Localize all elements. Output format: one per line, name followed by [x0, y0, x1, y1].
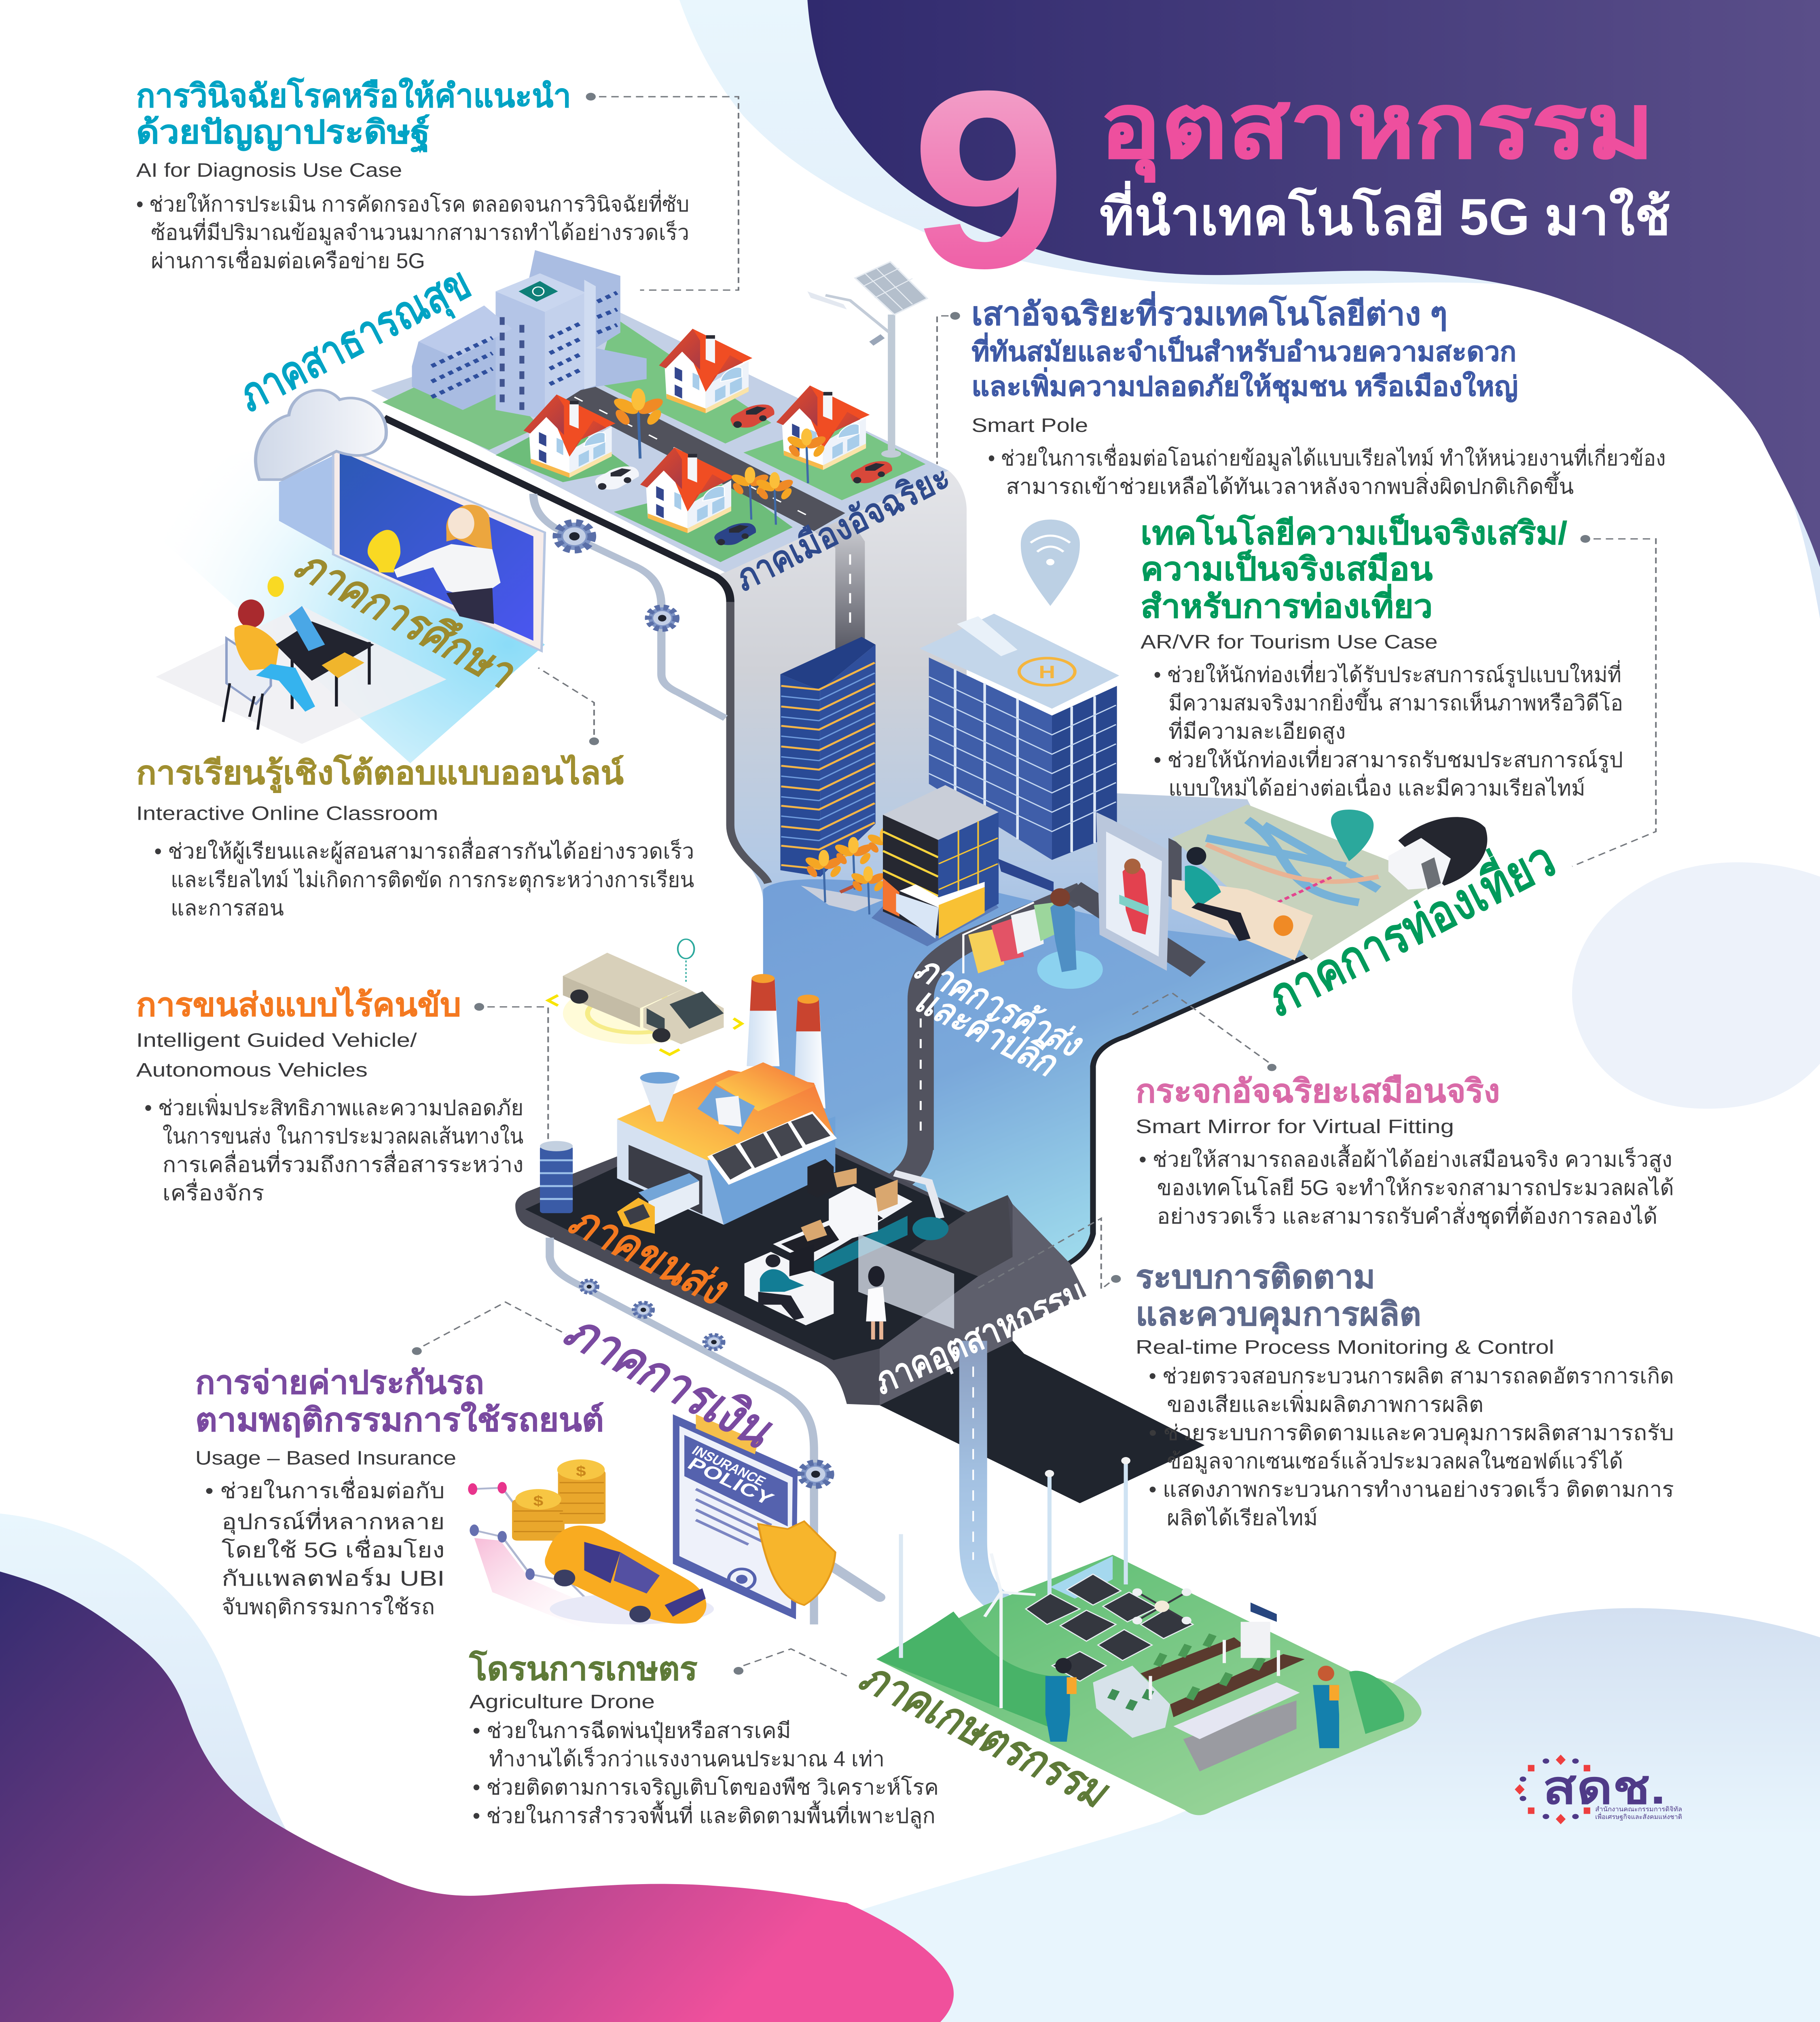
logo: ONDE: เพื่อเศรษฐกิจและสังคมแห่งชาติ: [1595, 1813, 1682, 1821]
bullet text: • ช่วยเพิ่มประสิทธิภาพและความปลอดภัย: [144, 1093, 523, 1120]
agriculture plate: [876, 1555, 1422, 1815]
subtitle: Autonomous Vehicles: [136, 1059, 368, 1081]
bullet text: แบบใหม่ได้อย่างต่อเนื่อง และมีความเรียลไทม์: [1168, 774, 1585, 800]
bullet text: • ช่วยติดตามการเจริญเติบโตของพืช วิเคราะห์โรค: [473, 1775, 939, 1800]
sector label: education: ภาคการศึกษา: [286, 542, 530, 697]
bullet text: ซ้อนที่มีปริมาณข้อมูลจำนวนมากสามารถทำได้อย่างรวดเร็ว: [151, 218, 689, 245]
bullet text: อุปกรณ์ที่หลากหลาย: [222, 1507, 445, 1535]
road: retail curve into factory: [883, 1141, 921, 1191]
bullet text: • ช่วยให้สามารถลองเสื้อผ้าได้อย่างเสมือนจริง ความเร็วสูง: [1139, 1144, 1672, 1172]
bullet text: • ช่วยให้การประเมิน การคัดกรองโรค ตลอดจนการวินิจฉัยที่ซับ: [136, 190, 689, 216]
connector: [1572, 535, 1656, 866]
pipe: finance link with gears: [550, 1237, 830, 1624]
heading: [136, 77, 571, 153]
heading: และควบคุมการผลิต: [1136, 1297, 1421, 1335]
pipe: drop to agriculture: [973, 1341, 1021, 1614]
connector: [1132, 993, 1276, 1071]
data graph nodes: [468, 1482, 609, 1637]
heading: [195, 1365, 604, 1438]
education light cone: [98, 445, 545, 763]
icon: vr headset: [1388, 817, 1487, 890]
bullet text: • ช่วยให้นักท่องเที่ยวได้รับประสบการณ์รูปแบบใหม่ที่: [1154, 660, 1621, 687]
clothes rack: [963, 903, 1057, 973]
small cargo truck: [617, 1173, 699, 1234]
heading: [1136, 1259, 1421, 1335]
smart pole: [807, 262, 927, 458]
smart mirror: [1096, 812, 1182, 971]
central ribbon: grey to blue smart city column: [715, 471, 1323, 1270]
background: bottom left light band: [0, 1514, 290, 1882]
heading: และเพิ่มความปลอดภัยให้ชุมชน หรือเมืองใหญ่: [971, 367, 1518, 404]
connector: [538, 668, 599, 745]
background: bottom right blue wave: [788, 1608, 1820, 2022]
bullet text: ของเทคโนโลยี 5G จะทำให้กระจกสามารถประมวลผลได้: [1157, 1176, 1674, 1200]
background: right pale blob: [1572, 862, 1820, 1109]
solar panels: [1026, 1574, 1193, 1681]
smart light poles: [901, 1457, 1130, 1658]
subtitle: Usage – Based Insurance: [195, 1447, 456, 1469]
icon: shield: [758, 1521, 835, 1605]
bullet text: • แสดงภาพกระบวนการทำงานอย่างรวดเร็ว ติดตามการ: [1149, 1477, 1674, 1502]
dark tail ramp: [880, 1341, 1204, 1503]
wind turbine: [985, 1553, 1035, 1708]
sector label: transport: ภาคขนส่ง: [560, 1197, 741, 1313]
background: dark purple header blob: [807, 0, 1820, 567]
sector label: tourism: ภาคการท่องเที่ยว: [1255, 824, 1564, 1027]
subtitle: Smart Mirror for Virtual Fitting: [1136, 1116, 1454, 1138]
desk worker: [745, 1244, 834, 1325]
bullet text: • ช่วยในการเชื่อมต่อกับ: [205, 1476, 445, 1503]
bullet text: เครื่องจักร: [163, 1178, 264, 1205]
bullet text: [1154, 660, 1623, 800]
panel: process monitoring: [976, 1218, 1674, 1530]
heading: เสาอัจฉริยะที่รวมเทคโนโลยีต่าง ๆ: [971, 291, 1448, 332]
delivery truck with sensing rings: [548, 939, 742, 1055]
connector: [976, 1218, 1121, 1289]
panel: autonomous vehicles: [136, 987, 548, 1205]
heading: กระจกอัจฉริยะเสมือนจริง: [1136, 1073, 1500, 1109]
background: light blue band behind header: [679, 0, 1820, 619]
sector label: industry: ภาคอุตสาหกรรม: [869, 1271, 1091, 1404]
bullet text: [136, 190, 689, 273]
background: bottom left purple pink blob: [0, 1571, 954, 2022]
bullet text: จับพฤติกรรมการใช้รถ: [222, 1595, 435, 1619]
pole strut under shield: [832, 1566, 880, 1597]
subtitle: AR/VR for Tourism Use Case: [1141, 631, 1438, 653]
bullet text: มีความสมจริงมากยิ่งขึ้น สามารถเห็นภาพหรือวิดีโอ: [1168, 688, 1623, 715]
sector label: smart city: ภาคเมืองอัจฉริยะ: [729, 456, 956, 599]
heading: การขนส่งแบบไร้คนขับ: [136, 987, 461, 1023]
connector: [586, 93, 739, 290]
bullet text: กับแพลตฟอร์ม UBI: [222, 1567, 445, 1591]
panel: agriculture drone: [469, 1649, 939, 1829]
heading: ที่ทันสมัยและจำเป็นสำหรับอำนวยความสะดวก: [971, 332, 1516, 367]
wifi location pin: [1021, 520, 1080, 606]
panel: usage based insurance: [195, 1302, 604, 1619]
sector label: wholesale and retail: ภาคการค้าส่ง: [907, 950, 1094, 1064]
shopper: [1037, 888, 1103, 989]
heading: ระบบการติดตาม: [1136, 1259, 1375, 1295]
bullet text: และเรียลไทม์ ไม่เกิดการติดขัด การกระตุกระหว่างการเรียน: [171, 867, 694, 893]
road: tourism side: [1073, 890, 1198, 969]
city plate: green ground with road: [371, 309, 948, 602]
bullet text: • ช่วยตรวจสอบกระบวนการผลิต สามารถลดอัตราการเกิด: [1149, 1364, 1674, 1388]
title line one: อุตสาหกรรม: [1100, 76, 1654, 182]
building: hospital: [412, 250, 647, 419]
building: glass tower with helipad: [920, 613, 1119, 860]
bullet text: [144, 1093, 523, 1205]
sector label: public health: ภาคสาธารณสุข: [231, 257, 480, 424]
bullet text: [988, 444, 1666, 498]
bullet text: ที่มีความละเอียดสูง: [1168, 717, 1346, 745]
palm plaza: [801, 827, 904, 914]
subtitle: Agriculture Drone: [470, 1690, 655, 1713]
sector label: wholesale and retail: และค้าปลีก: [907, 982, 1069, 1083]
bullet text: ข้อมูลจากเซนเซอร์แล้วประมวลผลในซอฟต์แวร์ได้: [1167, 1449, 1623, 1474]
bullet text: โดยใช้ 5G เชื่อมโยง: [222, 1536, 445, 1562]
subtitle: Interactive Online Classroom: [136, 802, 438, 824]
bullet text: ในการขนส่ง ในการประมวลผลเส้นทางใน: [163, 1124, 523, 1148]
gold coins: $: [533, 1493, 543, 1509]
bullet text: • ช่วยในการสำรวจพื้นที่ และติดตามพื้นที่เพาะปลูก: [473, 1800, 935, 1829]
bullet text: • ช่วยระบบการติดตามและควบคุมการผลิตสามารถรับ: [1149, 1421, 1674, 1446]
bullet text: ทำงานได้เร็วกว่าแรงงานคนประมาณ 4 เท่า: [489, 1747, 885, 1771]
panel: ar vr tourism: [1141, 513, 1656, 866]
tourism plate: map and sofa: [1172, 804, 1439, 960]
subtitle: Intelligent Guided Vehicle/: [136, 1029, 417, 1051]
subtitle: Real-time Process Monitoring & Control: [1136, 1336, 1554, 1358]
panel: smart mirror: [1132, 993, 1674, 1229]
connector: [412, 1302, 566, 1355]
robot arm and conveyor: [773, 1159, 948, 1276]
ribbon: lower blue retail section: [763, 879, 1323, 1289]
gears and pipe: education link: [533, 494, 726, 718]
connector: [474, 1003, 548, 1141]
bullet text: ผ่านการเชื่อมต่อเครือข่าย 5G: [151, 246, 425, 273]
gold coins: [512, 1459, 605, 1541]
ribbon: dark outer edge: [730, 602, 768, 883]
houses and trees: [523, 329, 892, 545]
building: yellow office and shops: [872, 785, 999, 946]
bullet text: • ช่วยให้ผู้เรียนและผู้สอนสามารถสื่อสารกันได้อย่างรวดเร็ว: [154, 837, 694, 864]
heading: โดรนการเกษตร: [469, 1650, 698, 1687]
logo: ONDE: สำนักงานคณะกรรมการดิจิทัล: [1595, 1805, 1682, 1813]
building: glass tower with helipad: H: [1039, 662, 1055, 682]
education desk plate: [156, 606, 447, 744]
bullet text: การเคลื่อนที่รวมถึงการสื่อสารระหว่าง: [163, 1150, 523, 1176]
bus: [998, 859, 1054, 892]
road: retail loop: [921, 892, 1083, 1150]
heading: เทคโนโลยีความเป็นจริงเสริม/: [1141, 513, 1567, 551]
bullet text: ของเสียและเพิ่มผลิตภาพการผลิต: [1167, 1390, 1484, 1416]
heading: ด้วยปัญญาประดิษฐ์: [136, 114, 430, 153]
ribbon: dark right edge: [1067, 949, 1323, 1265]
heading: การจ่ายค่าประกันรถ: [195, 1365, 484, 1401]
logo: ONDE: สดช.: [1543, 1762, 1666, 1813]
traveller on sofa: [1185, 847, 1251, 941]
planting beds and control unit: [1093, 1603, 1305, 1771]
panel: online classroom: [136, 668, 694, 920]
heading: [1141, 513, 1567, 625]
drone: [1132, 1588, 1191, 1624]
title: [911, 38, 1671, 321]
screen: online classroom teacher: [279, 444, 545, 651]
data stack: [540, 1141, 573, 1213]
panel: ai diagnosis: [136, 77, 739, 290]
heading: [971, 291, 1518, 404]
connector: [734, 1649, 847, 1676]
insurance policy document: POLICY: [684, 1454, 778, 1509]
insurance policy document: INSURANCE: [689, 1443, 769, 1489]
bullet text: [205, 1476, 445, 1619]
sector label: wholesale and retail: [907, 950, 1094, 1083]
title numeral 9: 9: [911, 38, 1067, 321]
student at desk: [223, 576, 374, 730]
gold coins: $: [576, 1464, 586, 1479]
bullet text: • ช่วยในการฉีดพ่นปุ๋ยหรือสารเคมี: [473, 1718, 791, 1743]
bullet text: [1149, 1364, 1674, 1530]
woman and hologram: [858, 1234, 954, 1339]
heading: สำหรับการท่องเที่ยว: [1141, 584, 1433, 625]
heading: การเรียนรู้เชิงโต้ตอบแบบออนไลน์: [136, 754, 624, 793]
road: smart city vertical road: [811, 512, 865, 658]
farmers: [1045, 1658, 1339, 1748]
subtitle: AI for Diagnosis Use Case: [136, 159, 402, 181]
heading: การวินิจฉัยโรคหรือให้คำแนะนำ: [136, 77, 571, 114]
building: dark blue tower: [780, 637, 876, 877]
bullet text: • ช่วยให้นักท่องเที่ยวสามารถรับชมประสบการณ์รูป: [1154, 745, 1623, 773]
heading: ความเป็นจริงเสมือน: [1141, 550, 1433, 587]
road center marks: [920, 1018, 921, 1141]
subtitle: Smart Pole: [971, 414, 1088, 436]
teacher: [368, 505, 501, 624]
bullet text: และการสอน: [171, 896, 284, 920]
chimneys: [747, 974, 825, 1109]
connector: [937, 312, 960, 464]
logo: ONDE: [1515, 1755, 1682, 1824]
sector label: agriculture: ภาคเกษตรกรรม: [850, 1654, 1123, 1816]
cloud: [256, 390, 386, 480]
bullet text: [473, 1718, 939, 1829]
bullet text: [1139, 1144, 1674, 1229]
panel: smart pole: [937, 291, 1666, 498]
industry dark plate: [515, 1147, 1086, 1405]
title line two: ที่นำเทคโนโลยี 5G มาใช้: [1100, 181, 1671, 245]
bullet text: [154, 837, 694, 920]
subtitle: [136, 1029, 417, 1081]
sector label: finance: ภาคการเงิน: [554, 1305, 789, 1457]
bullet text: สามารถเข้าช่วยเหลือได้ทันเวลาหลังจากพบสิ่งผิดปกติเกิดขึ้น: [1006, 471, 1574, 498]
bullet text: ผลิตได้เรียลไทม์: [1167, 1506, 1318, 1530]
factory building: [617, 1062, 837, 1225]
bullet text: อย่างรวดเร็ว และสามารถรับคำสั่งชุดที่ต้องการลองได้: [1157, 1201, 1657, 1229]
icon: green map pin: [1331, 810, 1373, 861]
yellow car: [545, 1525, 714, 1624]
insurance policy document: [673, 1414, 798, 1619]
heading: ตามพฤติกรรมการใช้รถยนต์: [195, 1402, 604, 1438]
